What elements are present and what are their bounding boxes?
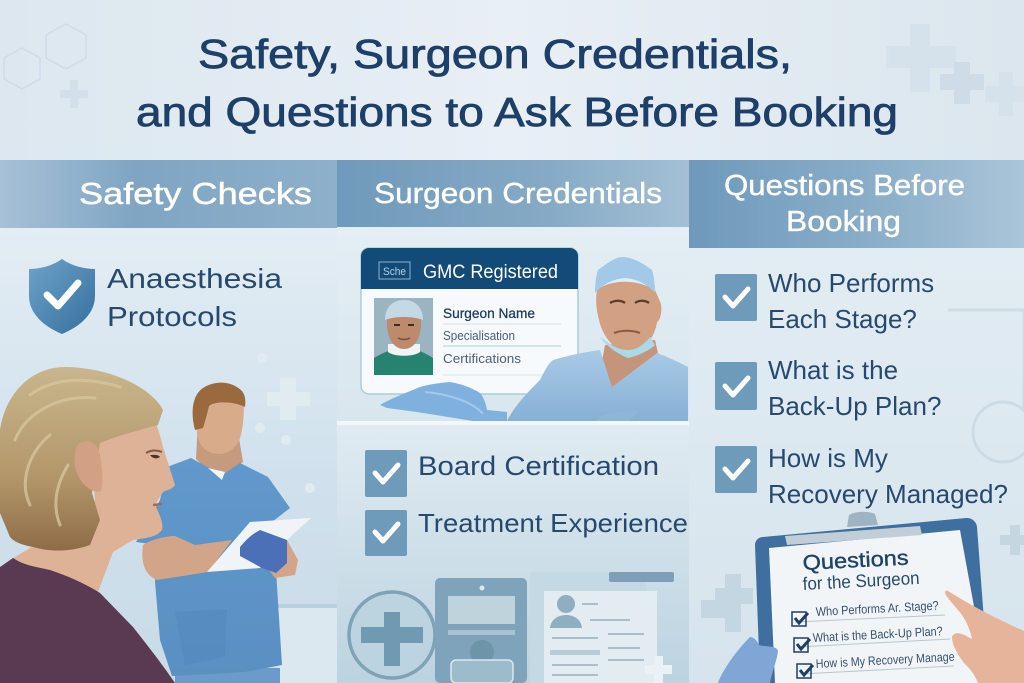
credential card: Specialisation [443, 329, 515, 343]
clipboard: What is the Back-Up Plan? [812, 624, 943, 645]
heading: questions before booking: Booking [786, 206, 901, 238]
credential card: Sche [383, 266, 406, 278]
question 2 [715, 355, 941, 421]
heading: questions before booking: Questions Before [724, 170, 965, 202]
text: anaesthesia protocols: Protocols [107, 301, 237, 332]
text: anaesthesia protocols [107, 263, 282, 332]
clipboard [755, 512, 988, 683]
checklist: board certification [365, 450, 659, 497]
checklist: treatment experience: Treatment Experience [418, 508, 688, 538]
credential card: GMC Registered [423, 262, 558, 283]
credential card: Certifications [443, 351, 522, 366]
checkbox 1 [365, 450, 407, 497]
clipboard: for the Surgeon [802, 568, 920, 594]
illustration: surgeon presenting card [380, 257, 688, 421]
clinic wall [277, 604, 337, 683]
credential card: Surgeon Name [443, 305, 535, 321]
clipboard: Questions [802, 546, 909, 575]
card portrait [374, 298, 433, 375]
heading: surgeon credentials [337, 160, 689, 227]
panel background crosses [255, 353, 315, 493]
panel: questions before booking [689, 160, 1024, 683]
credential card [361, 248, 578, 394]
icon: shield with check [29, 259, 95, 334]
faded cross [701, 574, 753, 632]
heading: surgeon credentials: Surgeon Credentials [374, 178, 662, 210]
illustration: woman in profile [0, 367, 175, 683]
clipboard: How is My Recovery Manage [815, 650, 955, 671]
clipboard: Who Performs Ar. Stage? [815, 599, 939, 619]
illustration: nurse with tablet [136, 383, 311, 683]
title: Safety, Surgeon Credentials, [198, 31, 792, 77]
background medical icons [948, 310, 1024, 462]
question 1: Each Stage? [768, 304, 917, 334]
question 3 [715, 443, 1008, 509]
text: anaesthesia protocols: Anaesthesia [107, 263, 282, 294]
checkbox 2 [365, 510, 407, 556]
title [136, 31, 898, 135]
pointing hand [945, 591, 1024, 683]
question 3: How is My [768, 443, 888, 473]
question 1 [715, 268, 934, 334]
question 1: Who Performs [768, 268, 934, 298]
title: and Questions to Ask Before Booking [136, 89, 898, 135]
illustration: faded id badge [435, 578, 527, 683]
gloved hand [718, 637, 778, 683]
panel: surgeon credentials [337, 160, 689, 683]
checklist: treatment experience [365, 508, 688, 556]
panel: safety checks [0, 160, 337, 683]
heading: safety checks: Safety Checks [79, 176, 312, 211]
decorative medical icons, title area [4, 24, 1024, 116]
illustration: faded medical cross badge [349, 592, 435, 678]
heading: questions before booking [689, 160, 1024, 248]
illustration: faded cv document [530, 572, 674, 683]
clipboard checkmarks [792, 612, 813, 678]
question 2: Back-Up Plan? [768, 391, 941, 421]
heading: safety checks [0, 160, 337, 228]
question 3: Recovery Managed? [768, 479, 1008, 509]
checklist: board certification: Board Certification [418, 451, 659, 481]
question 2: What is the [768, 355, 898, 385]
